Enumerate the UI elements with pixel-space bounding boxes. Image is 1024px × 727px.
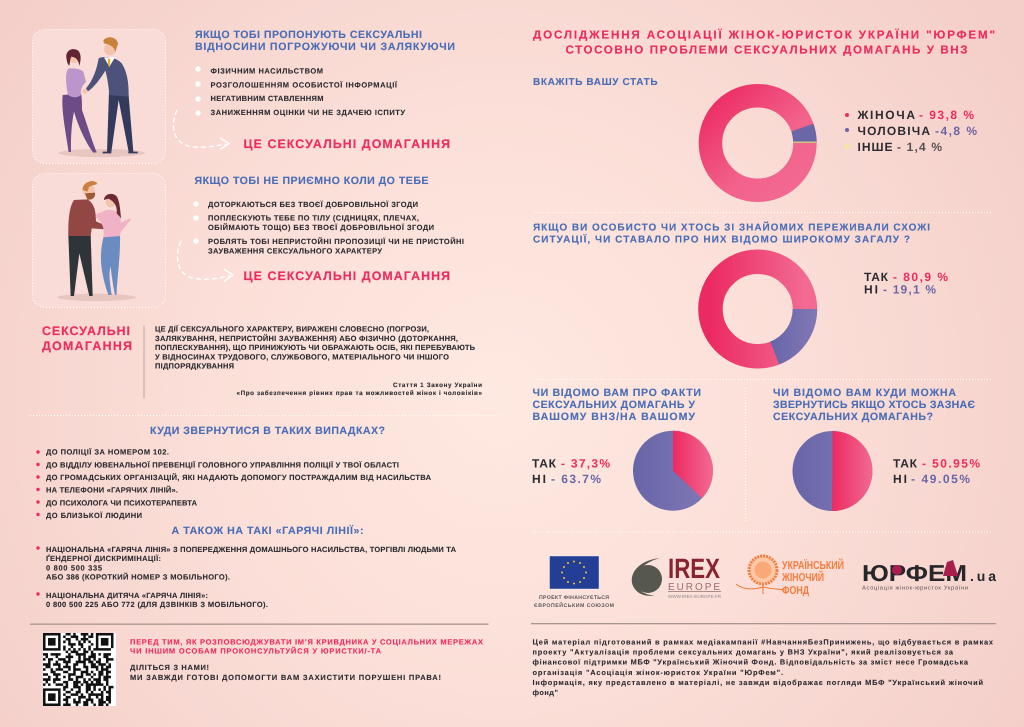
heading: where to turn question: СЕКСУАЛЬНИХ ДОМАГАНЬ? [773, 411, 933, 423]
citation: Стаття 1 Закону України [393, 382, 482, 389]
heading: public knowledge question: СИТУАЦІЇ, ЧИ СТАВАЛО ПРО НИХ ВІДОМО ШИРОКОМУ ЗАГАЛУ ? [533, 234, 910, 246]
list: unpleasant: РОБЛЯТЬ ТОБІ НЕПРИСТОЙНІ ПРОПОЗИЦІЇ ЧИ НЕ ПРИСТОЙНІ [208, 237, 464, 246]
callout: second conclusion: ЦЕ СЕКСУАЛЬНІ ДОМАГАННЯ [244, 269, 450, 283]
list: hotlines: 0 800 500 335 [46, 564, 102, 572]
logo: Ukrainian Women's Fund: УКРАЇНСЬКИЙ [782, 558, 844, 572]
logo: IREX Europe: WWW.IREX-EUROPE.FR [668, 594, 722, 599]
text block: definition: У ВІДНОСИНАХ ТРУДОВОГО, СЛУЖБОВОГО, МАТЕРІАЛЬНОГО ЧИ ІНШОГО [155, 352, 449, 362]
legend: where to turn: НІ [893, 472, 907, 486]
list: hotlines: НАЦІОНАЛЬНА «ГАРЯЧА ЛІНІЯ» З ПОПЕРЕДЖЕННЯ ДОМАШНЬОГО НАСИЛЬСТВА, ТОРГІВЛІ ЛЮДЬМИ ТА [46, 545, 457, 554]
heading: where to turn question [773, 387, 975, 423]
logo: Ukrainian Women's Fund: ЖІНОЧИЙ [781, 570, 824, 584]
heading: public knowledge question: ЯКЩО ВИ ОСОБИСТО ЧИ ХТОСЬ ЗІ ЗНАЙОМИХ ПЕРЕЖИВАЛИ СХОЖІ [533, 220, 930, 234]
list: hotlines: ҐЕНДЕРНОЇ ДИСКРИМІНАЦІЇ: [46, 554, 161, 563]
list: where to turn: ДО ГРОМАДСЬКИХ ОРГАНІЗАЦІЙ, ЯКІ НАДАЮТЬ ДОПОМОГУ ПОСТРАЖДАЛИМ ВІД НАСИЛЬСТВА [46, 473, 432, 482]
text block: disclaimer [532, 638, 994, 697]
heading: unpleasant: ЯКЩО ТОБІ НЕ ПРИЄМНО КОЛИ ДО ТЕБЕ [194, 175, 428, 187]
text block: definition [144, 324, 482, 398]
list: unpleasant [193, 200, 464, 256]
text block: warning: ЧИ ІНШИМ ОСОБАМ ПРОКОНСУЛЬТУЙСЯ У ЮРИСТКИ/-ТА [130, 646, 382, 656]
heading: where to turn: КУДИ ЗВЕРНУТИСЯ В ТАКИХ ВИПАДКАХ? [150, 425, 385, 437]
illustration: arguing couple [58, 37, 145, 157]
legend: public knowledge [864, 270, 948, 296]
legend: gender: ЖІНОЧА [856, 108, 915, 122]
legend: facts: - 63.7% [551, 472, 601, 486]
text block: disclaimer: проекту "Актуалізація проблеми сексуальних домагань у ВНЗ України", який реалізовується за [532, 648, 954, 656]
logo: YurFem: ЮРФЕМ [862, 560, 967, 586]
heading: definition term: ДОМАГАННЯ [42, 339, 132, 353]
text block: definition: ЗАЛЯКУВАННЯ, НЕПРИСТОЙНІ ЗАУВАЖЕННЯ) АБО ФІЗИЧНО (ДОТОРКАННЯ, [155, 334, 458, 343]
legend: facts [532, 456, 610, 486]
heading: facts question: ВАШОМУ ВНЗ/НА ВАШОМУ [532, 411, 695, 423]
list: hotlines [36, 545, 457, 609]
illustration: man touching woman [57, 181, 136, 301]
heading: facts question: ЧИ ВІДОМО ВАМ ПРО ФАКТИ [532, 387, 701, 399]
citation [236, 382, 482, 397]
list: hotlines: АБО 386 (КОРОТКИЙ НОМЕР З МОБІЛЬНОГО). [46, 572, 230, 582]
list: unpleasant: ПОПЛЕСКУЮТЬ ТЕБЕ ПО ТІЛУ (СІДНИЦЯХ, ПЛЕЧАХ, [208, 214, 419, 222]
text block: disclaimer: Цей матеріал підготований в рамках медіакампанії #НавчанняБезПринижень, що відбувається в рамках [532, 638, 994, 646]
list: threats: РОЗГОЛОШЕННЯМ ОСОБИСТОЇ ІНФОРМАЦІЇ [210, 80, 398, 90]
legend: gender: - 1,4 % [897, 140, 942, 154]
logo: Ukrainian Women's Fund: ФОНД [782, 585, 809, 597]
heading: where to turn question: ЗВЕРНУТИСЬ ЯКЩО ХТОСЬ ЗАЗНАЄ [773, 399, 975, 411]
list: threats: ФІЗИЧНИМ НАСИЛЬСТВОМ [210, 66, 323, 76]
QR code [43, 633, 116, 706]
text block: warning: ПЕРЕД ТИМ, ЯК РОЗПОВСЮДЖУВАТИ ІМ’Я КРИВДНИКА У СОЦІАЛЬНИХ МЕРЕЖАХ [130, 637, 483, 646]
legend: gender [845, 108, 977, 154]
list: where to turn: ДО ПСИХОЛОГА ЧИ ПСИХОТЕРАПЕВТА [46, 498, 198, 508]
panel: illustration unwanted touching [32, 174, 166, 308]
logo: YurFem: Асоціація жінок-юристок України [862, 584, 968, 592]
legend: public knowledge: НІ [864, 282, 878, 296]
list: hotlines: НАЦІОНАЛЬНА ДИТЯЧА «ГАРЯЧА ЛІНІЯ»: [46, 591, 208, 600]
heading: threats: ВІДНОСИНИ ПОГРОЖУЮЧИ ЧИ ЗАЛЯКУЮЧИ [195, 41, 455, 53]
heading: where to turn question: ЧИ ВІДОМО ВАМ КУДИ МОЖНА [773, 387, 956, 399]
text block: disclaimer: організація "Асоціація жінок-юристок України "ЮрФем". [532, 668, 783, 677]
legend: facts: - 37,3% [561, 456, 610, 470]
panel: illustration harassment by threat [32, 30, 166, 164]
text block: warning [130, 637, 483, 682]
legend: gender: ІНШЕ [858, 140, 892, 154]
legend: where to turn: ТАК [893, 456, 918, 470]
text block: definition: ПОПЛЕСКУВАННЯ), ЩО ПРИНИЖУЮТЬ ЧИ ОБРАЖАЮТЬ ОСІБ, ЯКІ ПЕРЕБУВАЮТЬ [155, 343, 476, 352]
legend: where to turn: - 50.95% [922, 456, 980, 470]
legend: gender: -4,8 % [935, 124, 977, 138]
list: where to turn: ДО ПОЛІЦІЇ ЗА НОМЕРОМ 102. [46, 448, 169, 457]
logo: EU [534, 556, 614, 609]
donut chart: gender [710, 96, 817, 190]
list: threats: НЕГАТИВНИМ СТАВЛЕННЯМ [210, 94, 324, 103]
heading: hotlines: А ТАКОЖ НА ТАКІ «ГАРЯЧІ ЛІНІЇ»: [172, 524, 364, 537]
logo: Ukrainian Women's Fund [736, 556, 844, 597]
pie chart: where to turn [792, 431, 872, 511]
pie chart: facts [633, 431, 713, 511]
text block: definition: ПІДПОРЯДКУВАННЯ [155, 362, 234, 370]
text block: warning: ДІЛІТЬСЯ З НАМИ! [130, 663, 209, 672]
callout: first conclusion: ЦЕ СЕКСУАЛЬНІ ДОМАГАННЯ [244, 137, 450, 151]
title [533, 28, 995, 56]
legend: where to turn [893, 456, 980, 486]
text block: disclaimer: Інформація, яку представлено в матеріалі, не завжди відображає погляди МБФ "Український жіночий [532, 678, 983, 687]
legend: public knowledge: - 80,9 % [893, 270, 948, 284]
logo: IREX Europe: IREX [668, 553, 720, 584]
list: threats [195, 66, 405, 117]
logo: IREX Europe [632, 553, 722, 599]
arrow: second conclusion [177, 241, 233, 282]
text block: definition: ЦЕ ДІЇ СЕКСУАЛЬНОГО ХАРАКТЕРУ, ВИРАЖЕНІ СЛОВЕСНО (ПОГРОЗИ, [155, 324, 429, 334]
list: unpleasant: ЗАУВАЖЕННЯ СЕКСУАЛЬНОГО ХАРАКТЕРУ [208, 246, 382, 256]
heading: threats [195, 29, 455, 53]
title: СТОСОВНО ПРОБЛЕМИ СЕКСУАЛЬНИХ ДОМАГАНЬ У ВНЗ [566, 44, 968, 56]
list: hotlines: 0 800 500 225 АБО 772 (ДЛЯ ДЗВІНКІВ З МОБІЛЬНОГО). [46, 600, 268, 609]
text block: warning: МИ ЗАВЖДИ ГОТОВІ ДОПОМОГТИ ВАМ ЗАХИСТИТИ ПОРУШЕНІ ПРАВА! [130, 673, 441, 682]
citation: «Про забезпечення рівних прав та можливостей жінок і чоловіків» [236, 390, 482, 397]
legend: gender: ЧОЛОВІЧА [858, 124, 930, 138]
list: where to turn [36, 448, 432, 520]
heading: gender question: ВКАЖІТЬ ВАШУ СТАТЬ [533, 77, 658, 88]
logo: EU: ПРОЕКТ ФІНАНСУЄТЬСЯ [539, 595, 609, 601]
legend: gender: - 93,8 % [919, 108, 974, 122]
legend: where to turn: - 49.05% [911, 472, 970, 486]
logo: EU: ЄВРОПЕЙСЬКИМ СОЮЗОМ [534, 602, 614, 609]
logo: IREX Europe: EUROPE [668, 582, 720, 593]
legend: facts: НІ [532, 472, 546, 486]
heading: threats: ЯКЩО ТОБІ ПРОПОНУЮТЬ СЕКСУАЛЬНІ [195, 29, 422, 41]
list: unpleasant: ОБІЙМАЮТЬ ТОЩО) БЕЗ ТВОЄЇ ДОБРОВІЛЬНОЇ ЗГОДИ [208, 223, 434, 232]
donut chart: public knowledge [710, 262, 817, 364]
heading: definition term: СЕКСУАЛЬНІ [42, 324, 130, 338]
logo: YurFem [862, 560, 996, 592]
logo: YurFem: .ua [970, 568, 996, 584]
heading: facts question [532, 387, 701, 423]
arrow: first conclusion [173, 110, 229, 150]
legend: public knowledge: - 19,1 % [883, 282, 936, 296]
list: where to turn: ДО БЛИЗЬКОЇ ЛЮДИНИ [46, 511, 142, 520]
legend: facts: ТАК [532, 456, 557, 470]
heading: public knowledge question [533, 220, 930, 246]
text block: disclaimer: фонд" [532, 688, 558, 697]
text block: disclaimer: фінансової підтримки МБФ "Український Жіночий Фонд. Відповідальність за зміст несе Громадська [532, 658, 969, 666]
legend: public knowledge: ТАК [864, 270, 889, 284]
heading: definition term [42, 324, 132, 353]
list: threats: ЗАНИЖЕННЯМ ОЦІНКИ ЧИ НЕ ЗДАЧЕЮ ІСПИТУ [210, 108, 405, 117]
list: where to turn: НА ТЕЛЕФОНИ «ГАРЯЧИХ ЛІНІЙ». [46, 486, 178, 494]
heading: facts question: СЕКСУАЛЬНИХ ДОМАГАНЬ У [532, 399, 695, 411]
list: where to turn: ДО ВІДДІЛУ ЮВЕНАЛЬНОЇ ПРЕВЕНЦІЇ ГОЛОВНОГО УПРАВЛІННЯ ПОЛІЦІЇ У ТВОЇ ОБЛАСТІ [46, 460, 399, 470]
title: ДОСЛІДЖЕННЯ АСОЦІАЦІЇ ЖІНОК-ЮРИСТОК УКРАЇНИ "ЮРФЕМ" [533, 28, 995, 42]
list: unpleasant: ДОТОРКАЮТЬСЯ БЕЗ ТВОЄЇ ДОБРОВІЛЬНОЇ ЗГОДИ [208, 200, 418, 209]
